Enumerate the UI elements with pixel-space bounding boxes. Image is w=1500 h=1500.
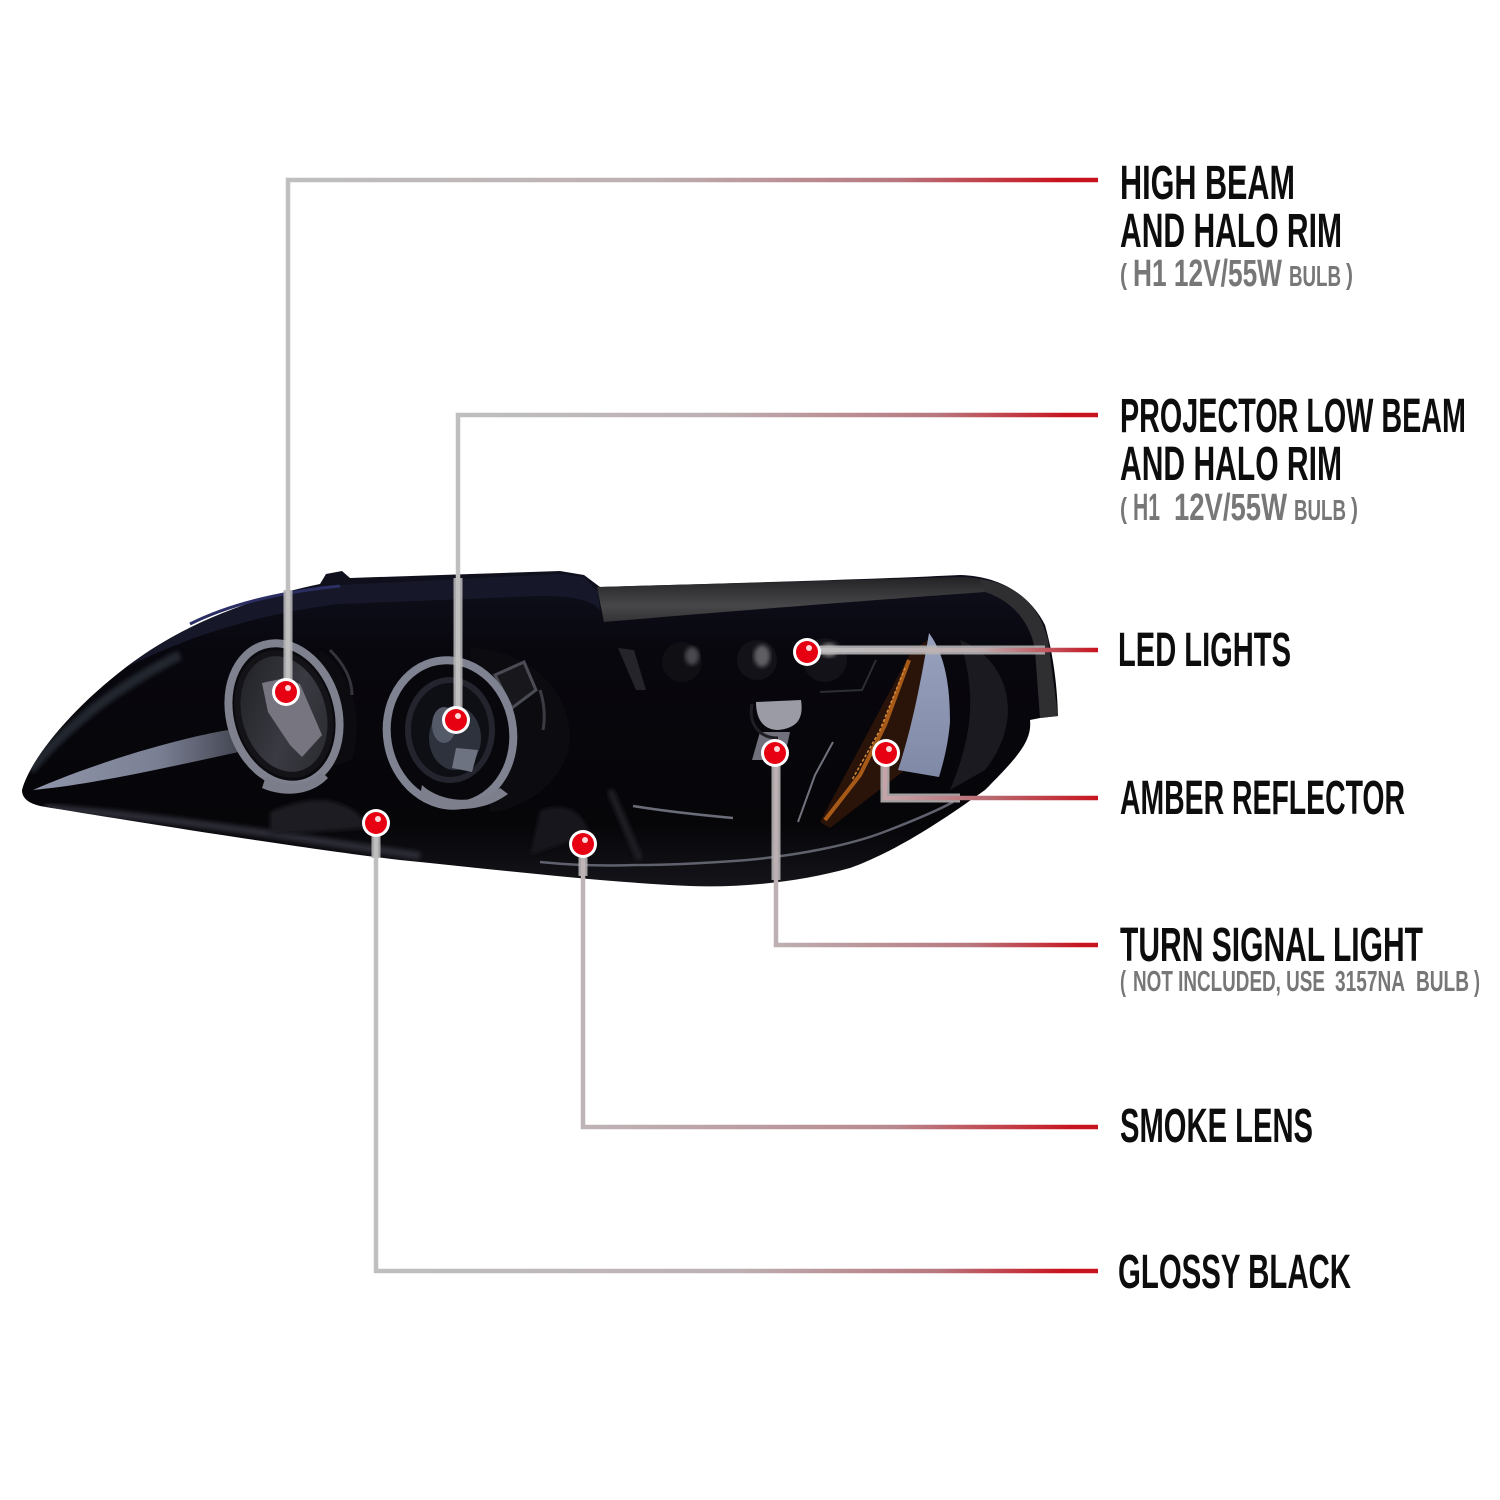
marker: LED lights: [793, 638, 821, 666]
label: projector low beam and halo rim: 12V/55W: [1174, 487, 1287, 529]
label: projector low beam and halo rim: BULB: [1294, 495, 1346, 527]
top trim highlight: [125, 574, 600, 668]
label: turn signal light: 3157NA: [1335, 966, 1405, 998]
amber reflector: [820, 640, 928, 828]
leader: projector low beam: [458, 415, 1098, 720]
projector lens with halo ring: [375, 648, 570, 816]
upper grey shelf: [597, 577, 1042, 625]
label: turn signal light: NOT INCLUDED, USE: [1133, 966, 1325, 998]
label: projector low beam and halo rim: (: [1120, 493, 1127, 525]
glass reflection panel: [898, 633, 950, 777]
label: turn signal light: [1120, 919, 1480, 998]
label: turn signal light: (: [1120, 966, 1126, 998]
leader: amber reflector: [885, 753, 1098, 798]
right rim: [980, 579, 1058, 718]
lower inner reflections: [633, 806, 733, 818]
leader: high beam: [288, 180, 1098, 692]
marker: projector low beam: [442, 706, 470, 734]
headlight assembly: [22, 571, 1058, 886]
housing sheen details: [30, 655, 590, 856]
label: high beam and halo rim: HIGH BEAM: [1120, 157, 1295, 210]
high beam lens with halo ring: [212, 630, 357, 798]
label: high beam and halo rim: ): [1346, 259, 1353, 291]
headlight housing: [22, 571, 1058, 886]
marker: high beam: [272, 678, 300, 706]
turn signal bulb reflection: [751, 700, 802, 760]
label: high beam and halo rim: (: [1120, 259, 1127, 291]
marker: glossy black: [362, 809, 390, 837]
leader: glossy black: [376, 823, 1098, 1271]
LED light pods: [618, 638, 876, 692]
lower-right rim highlight: [540, 802, 953, 866]
label: projector low beam and halo rim: H1: [1133, 487, 1160, 529]
label: projector low beam and halo rim: AND HALO RIM: [1120, 438, 1342, 491]
right inner lens: [950, 640, 1008, 790]
label: glossy black: GLOSSY BLACK: [1118, 1246, 1351, 1299]
marker: smoke lens: [569, 830, 597, 858]
glossy streak left: [33, 730, 243, 790]
label: high beam and halo rim: [1120, 157, 1353, 295]
leader: turn signal: [776, 753, 1098, 945]
label: high beam and halo rim: H1 12V/55W: [1133, 253, 1282, 295]
label: smoke lens: SMOKE LENS: [1120, 1100, 1313, 1153]
label: turn signal light: BULB: [1416, 966, 1469, 998]
leader halos over lamp: [288, 578, 1045, 880]
leader: smoke lens: [583, 845, 1098, 1127]
label: high beam and halo rim: BULB: [1289, 261, 1341, 293]
label: LED lights: LED LIGHTS: [1118, 624, 1291, 677]
label: high beam and halo rim: AND HALO RIM: [1120, 205, 1342, 258]
leader: LED lights: [808, 648, 1098, 652]
label: projector low beam and halo rim: [1120, 390, 1466, 529]
label: turn signal light: ): [1474, 966, 1480, 998]
marker: amber reflector: [872, 739, 900, 767]
marker: turn signal: [761, 739, 789, 767]
label: projector low beam and halo rim: ): [1351, 493, 1358, 525]
